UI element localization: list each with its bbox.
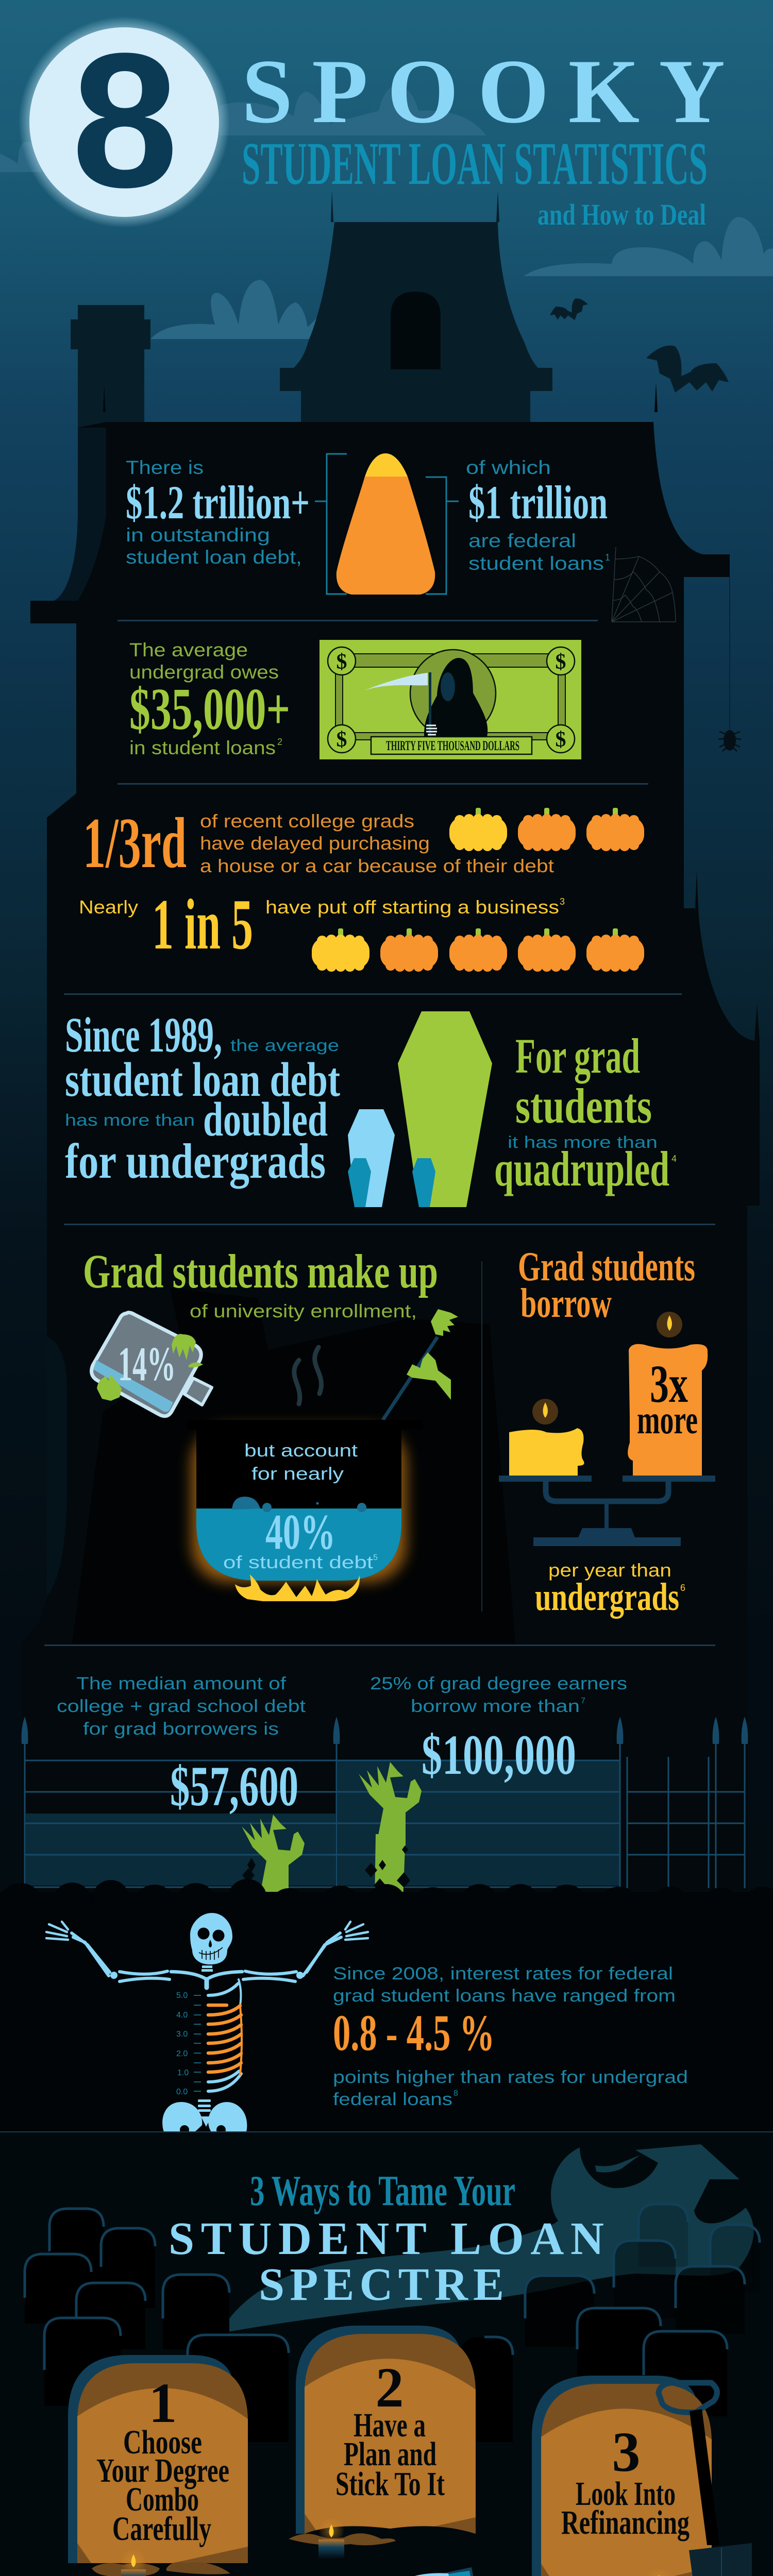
text: grad debt quadrupled: 4 xyxy=(671,1154,677,1164)
text: one in five put off business: Nearly xyxy=(79,896,138,918)
text: undergrad owes xyxy=(129,639,290,758)
text: undergrad owes: 2 xyxy=(277,737,282,747)
text: undergrad debt doubled: doubled xyxy=(203,1093,328,1146)
text: undergrad debt doubled: for undergrads xyxy=(65,1133,326,1189)
panel: debt growth since 1989 xyxy=(65,1007,677,1207)
icon: cauldron with 40%: of student debt xyxy=(223,1553,374,1572)
moon with number 8: 8 xyxy=(72,13,178,227)
icon: candles on stand xyxy=(499,1312,715,1546)
heading: grad students borrow: borrow xyxy=(520,1281,612,1326)
icon: cauldron with 40%: 5 xyxy=(373,1553,378,1562)
panel: median grad debt xyxy=(57,1674,306,1818)
panel: tombstone 1: Your Degree xyxy=(96,2452,229,2489)
icon: skeleton rib chart xyxy=(46,1913,368,2134)
panel: tombstone 1 xyxy=(68,2355,248,2576)
panel: delayed purchases and businesses xyxy=(79,803,644,972)
panel: quarter of grad earners: borrow more than xyxy=(411,1697,580,1716)
text: interest rate range: 8 xyxy=(453,2089,458,2098)
divider between panels xyxy=(481,1261,482,1612)
text: one third delayed purchasing xyxy=(83,803,554,883)
icon: five pumpkins xyxy=(312,928,644,972)
heading: grad students borrow: Grad students xyxy=(518,1244,695,1290)
text: one third delayed purchasing: have delayed purchasing xyxy=(200,833,430,854)
text: one in five put off business: 3 xyxy=(560,896,565,907)
panel: median grad debt: $57,600 xyxy=(170,1755,298,1818)
icon: hanging spider xyxy=(718,577,741,751)
text: total outstanding: student loan debt, xyxy=(126,547,302,568)
panel: total student debt xyxy=(126,453,610,595)
ghost with graduation cap xyxy=(220,2144,754,2333)
text: total outstanding: $1.2 trillion+ xyxy=(126,476,310,529)
panel: quarter of grad earners: 25% of grad degree earners xyxy=(370,1674,627,1693)
text: undergrad owes: $35,000+ xyxy=(129,676,290,742)
candy corn icon with brackets xyxy=(315,453,459,595)
panel: quarter of grad earners xyxy=(370,1674,627,1786)
background tombstones xyxy=(25,2204,760,2442)
clouds xyxy=(0,85,773,339)
text: total outstanding: There is xyxy=(126,457,204,478)
heading: 3 ways to tame your student loan spectre: 3 Ways to Tame Your xyxy=(250,2167,515,2215)
icon: potion bottle 14% xyxy=(92,1313,212,1416)
panel: tombstone 1: Carefully xyxy=(112,2510,211,2548)
panel: tombstone 3: 3 xyxy=(612,2420,640,2483)
panel: tombstone 2: Have a xyxy=(354,2406,426,2444)
panel: tombstone 2 xyxy=(289,2326,476,2559)
text: grad debt quadrupled: quadrupled xyxy=(494,1141,669,1196)
panel: tombstone 1: Combo xyxy=(126,2481,199,2518)
text: undergrad debt doubled: has more than xyxy=(65,1111,195,1129)
text: per year than undergrads: undergrads xyxy=(535,1575,679,1619)
icon: coffins xyxy=(348,1011,492,1207)
title: SPOOKY xyxy=(242,40,725,142)
text: interest rate range: points higher than rates for undergrad xyxy=(333,2067,688,2087)
heading: 3 ways to tame your student loan spectre: SPECTRE xyxy=(259,2259,504,2310)
text: one third delayed purchasing: of recent college grads xyxy=(200,810,414,832)
icon: dollar bill with reaper: $ xyxy=(336,728,347,752)
panel: tombstone 2: Plan and xyxy=(344,2435,436,2473)
text: total outstanding xyxy=(126,457,310,568)
text: federal share: of which xyxy=(466,457,551,478)
icon: skeleton rib chart: 5.0 xyxy=(176,1991,188,2000)
icon: spell book xyxy=(295,2567,484,2576)
text: per year than undergrads xyxy=(535,1560,685,1619)
icon: cauldron with 40%: for nearly xyxy=(251,1464,344,1484)
panel: average undergrad debt xyxy=(129,639,581,759)
dirt and candle xyxy=(92,2549,230,2576)
icon: skeleton rib chart: 1.0 xyxy=(177,2069,189,2077)
icon: candles on stand: more xyxy=(637,1397,698,1442)
moon with number 8 xyxy=(19,13,230,228)
heading: 3 ways to tame your student loan spectre xyxy=(169,2167,604,2310)
text: per year than undergrads: per year than xyxy=(548,1560,671,1581)
icon: dollar bill with reaper: $ xyxy=(556,650,566,674)
icon: cauldron with 40%: 40% xyxy=(265,1504,335,1560)
text: per year than undergrads: 6 xyxy=(680,1583,685,1593)
panel: tombstone 1: 1 xyxy=(148,2371,177,2434)
icon: skeleton rib chart: 3.0 xyxy=(176,2030,188,2039)
heading: grad students make up xyxy=(83,1245,438,1321)
icon: skeleton rib chart: 2.0 xyxy=(176,2049,188,2058)
text: undergrad debt doubled: the average xyxy=(230,1036,339,1055)
icon: dollar bill with reaper: $ xyxy=(336,650,347,674)
heading: grad students borrow xyxy=(518,1244,695,1326)
panel: tombstone 3: Refinancing xyxy=(561,2504,690,2541)
text: federal share: 1 xyxy=(605,552,610,563)
text: undergrad debt doubled: student loan debt xyxy=(65,1053,340,1107)
text: undergrad owes: The average xyxy=(129,639,248,660)
icon: zombie hands xyxy=(242,1762,422,1901)
text: undergrad owes: undergrad owes xyxy=(129,662,279,683)
icon: witch hands and spoon xyxy=(383,1309,458,1420)
text: federal share: student loans xyxy=(468,553,604,574)
panel: tombstone 3 xyxy=(532,2376,712,2576)
icon: cauldron with 40%: but account xyxy=(244,1441,358,1461)
text: grad debt quadrupled: it has more than xyxy=(508,1133,658,1151)
panel: interest rates skeleton xyxy=(46,1913,688,2134)
text: one in five put off business xyxy=(79,885,565,964)
panel: median grad debt: The median amount of xyxy=(76,1674,287,1693)
dirt and candle xyxy=(289,2518,476,2559)
icon: shovel xyxy=(659,2383,752,2576)
panel: quarter of grad earners: $100,000 xyxy=(422,1723,576,1786)
text: federal share: are federal xyxy=(468,530,576,551)
icon: skeleton rib chart: 0.0 xyxy=(176,2088,188,2096)
text: federal share: $1 trillion xyxy=(468,476,608,529)
text: grad debt quadrupled xyxy=(494,1028,677,1196)
heading: 3 ways to tame your student loan spectre: STUDENT LOAN xyxy=(169,2213,604,2264)
icon: steam xyxy=(294,1347,321,1404)
icon: potion bottle 14%: 14% xyxy=(118,1337,176,1391)
panel: quarter of grad earners: 7 xyxy=(581,1697,585,1705)
text: undergrad owes: in student loans xyxy=(129,737,276,758)
icon: dollar bill with reaper xyxy=(320,640,581,759)
haunted castle silhouette xyxy=(22,191,760,1891)
panel: median grad debt: for grad borrowers is xyxy=(83,1719,279,1739)
text: one in five put off business: have put off starting a business xyxy=(265,896,559,918)
heading: grad students make up: of university enrollment, xyxy=(190,1300,417,1321)
icon: cobweb xyxy=(612,547,676,622)
icon: bats xyxy=(550,298,729,393)
graveyard fence xyxy=(22,1717,748,1888)
heading: grad students make up: Grad students make up xyxy=(83,1245,438,1298)
panel: tombstone 2: Stick To It xyxy=(335,2465,445,2503)
text: federal share xyxy=(466,457,610,574)
text: interest rate range: federal loans xyxy=(333,2090,452,2109)
icon: dollar bill with reaper: $ xyxy=(556,728,566,752)
text: grad debt quadrupled: For grad xyxy=(515,1028,640,1083)
text: one third delayed purchasing: 1/3rd xyxy=(83,803,187,883)
text: interest rate range: Since 2008, interest rates for federal xyxy=(333,1964,673,1984)
black ground xyxy=(0,1879,773,2134)
lower section background xyxy=(0,2132,773,2576)
text: undergrad debt doubled: Since 1989, xyxy=(65,1007,222,1062)
dirt and candle xyxy=(582,2569,700,2576)
icon: skeleton rib chart: 4.0 xyxy=(176,2011,188,2020)
icon: three pumpkins xyxy=(449,808,644,851)
text: undergrad debt doubled xyxy=(65,1007,340,1189)
text: total outstanding: in outstanding xyxy=(126,524,270,546)
text: one third delayed purchasing: a house or a car because of their debt xyxy=(200,855,554,876)
panel: tombstone 2: 2 xyxy=(375,2356,404,2419)
panel: tombstone 3: Look Into xyxy=(576,2475,676,2513)
title xyxy=(242,40,725,231)
panel: tombstone 1: Choose xyxy=(123,2424,202,2461)
icon: dollar bill with reaper: THIRTY FIVE THOUSAND DOLLARS xyxy=(386,738,519,753)
icon: cauldron with 40% xyxy=(187,1420,423,1601)
text: interest rate range: grad student loans have ranged from xyxy=(333,1986,676,2006)
title: and How to Deal xyxy=(537,198,706,231)
icon: candles on stand: 3x xyxy=(650,1354,688,1414)
text: interest rate range: 0.8 - 4.5 % xyxy=(333,2004,495,2061)
panel: grad students enrollment and debt xyxy=(83,1244,715,1619)
panel: median grad debt: college + grad school debt xyxy=(57,1697,306,1716)
text: interest rate range xyxy=(333,1964,688,2109)
text: one in five put off business: 1 in 5 xyxy=(152,885,253,964)
text: grad debt quadrupled: students xyxy=(515,1078,652,1133)
